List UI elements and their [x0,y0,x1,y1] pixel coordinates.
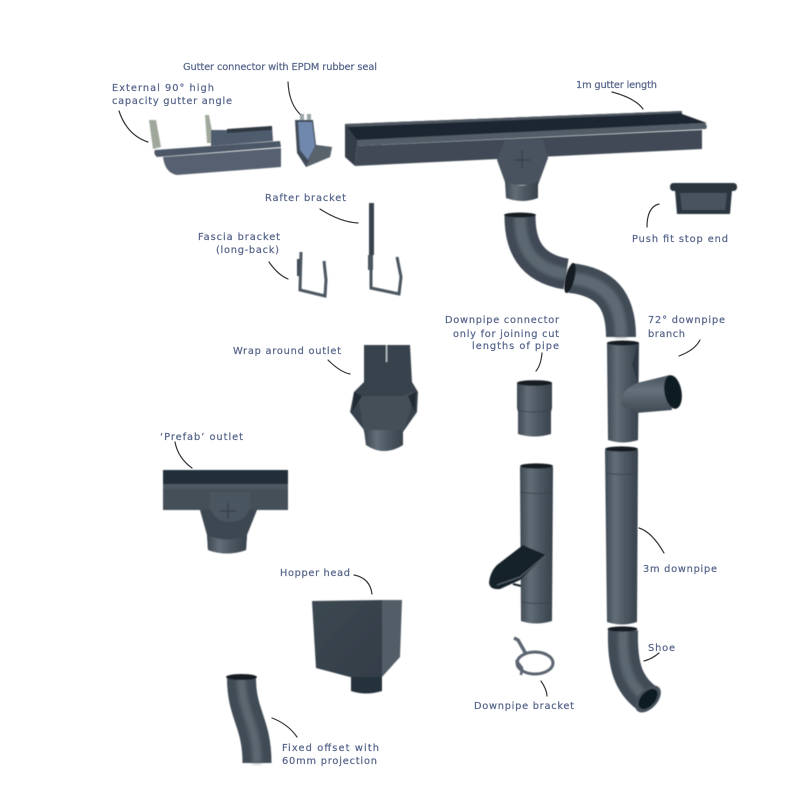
label: downpipe connector line 2: only for joining cut [453,329,559,340]
label: branch line 1: 72° downpipe [648,315,725,326]
icon: hopper head [312,600,402,694]
component: hopper head [280,568,402,694]
icon: gutter connector [295,114,332,167]
component: 3m downpipe [605,446,717,624]
component: downpipe connector [445,315,560,436]
leader line [644,653,659,661]
icon: upper bend [504,212,566,274]
icon: stop end [670,183,737,214]
icon: wrap around outlet [350,345,418,451]
leader line [541,681,547,696]
component: wrap around outlet [233,345,418,451]
label: external angle: External 90° high [112,83,214,94]
component: push fit stop end [632,183,737,245]
component: prefab outlet [160,432,288,554]
leader line [175,442,192,468]
leader line [354,575,372,594]
leader line [272,718,297,737]
icon: rafter bracket [368,203,401,294]
component: shoe [608,626,675,717]
component: gutter connector [183,62,377,167]
leader line [320,209,358,223]
label: gutter connector: Gutter connector with EPDM rubber seal [183,62,377,73]
component: external gutter angle [112,83,281,175]
label: branch line 2: branch [648,329,685,340]
component: fixed offset [226,674,379,767]
component: fascia bracket [198,232,326,296]
label: fixed offset line 2: 60mm projection [282,756,377,767]
icon: gutter angle [149,115,281,175]
leader line [647,204,659,227]
label: wrap around outlet: Wrap around outlet [233,346,341,357]
label: stop end: Push fit stop end [632,234,728,245]
label: downpipe connector line 1: Downpipe connector [445,315,560,326]
icon: fascia bracket [297,252,326,296]
icon: offset pipe [226,674,257,763]
label: external angle line 2: capacity gutter angle [112,96,232,107]
icon: prefab outlet [163,470,288,554]
label: 3m downpipe: 3m downpipe [643,564,717,575]
label: downpipe connector line 3: lengths of pipe [472,341,559,352]
label: long-back: (long-back) [216,245,279,256]
icon: pipe bracket [514,638,553,675]
leader line [269,262,288,279]
leader line [612,92,643,109]
label: fixed offset line 1: Fixed offset with [282,743,379,754]
label: shoe: Shoe [648,643,675,654]
label: hopper head: Hopper head [280,568,350,579]
component: rafter bracket [265,193,401,294]
leader line [288,82,302,116]
leader line [679,340,700,356]
icon: lower bend [562,262,621,337]
leader line [639,528,664,553]
leader line [119,111,148,142]
label: rafter bracket: Rafter bracket [265,193,346,204]
label: prefab outlet: ‘Prefab’ outlet [160,432,243,443]
icon: gutter with outlet [345,111,707,201]
label: 1m gutter length: 1m gutter length [576,80,657,91]
icon: access pipe [489,463,553,624]
component: access pipe [489,463,553,624]
leader line [536,353,542,371]
label: downpipe bracket: Downpipe bracket [474,701,574,712]
component: downpipe bends [504,212,621,337]
icon: pipe connector [517,380,552,436]
icon: shoe [608,626,666,717]
icon: branch pipe [607,340,684,442]
icon: straight pipe [605,446,638,624]
leader line [328,360,350,374]
label: fascia bracket: Fascia bracket [198,232,280,243]
component: 1m gutter length [345,80,707,201]
component: downpipe bracket [474,638,574,712]
component: 72 degree branch [607,315,725,442]
